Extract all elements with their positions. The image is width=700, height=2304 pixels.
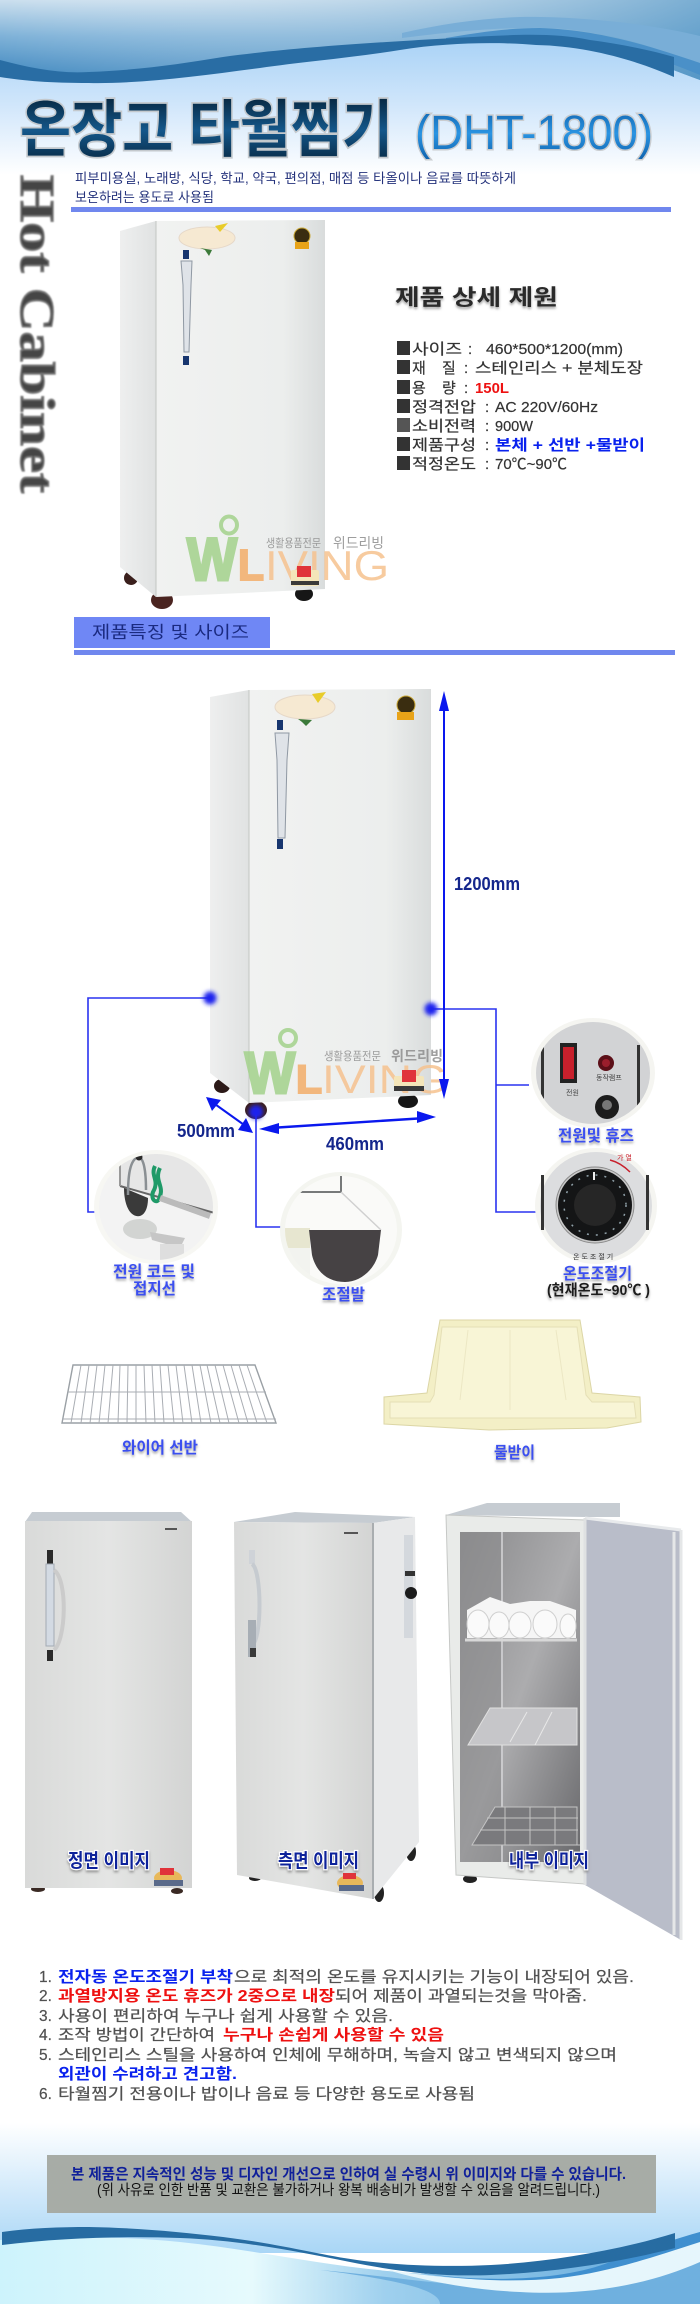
specification list: 사이즈 <box>412 341 462 358</box>
usage description: 보온하려는 용도로 사용됨 <box>75 190 214 205</box>
usage description: 피부미용실, 노래방, 식당, 학교, 약국, 편의점, 매점 등 타올이나 음료를 따뜻하게 <box>75 171 516 186</box>
section tab: features and size <box>74 617 270 648</box>
caption: temperature controller <box>547 1265 650 1299</box>
specification list: 70℃~90℃ <box>495 456 567 473</box>
callout lens: power switch and fuse: 전원 <box>566 1088 579 1097</box>
caption: drip tray: 물받이 <box>494 1444 535 1462</box>
caption: interior view: 내부 이미지 <box>509 1850 589 1872</box>
watermark logo 1: W <box>187 526 237 593</box>
feature list: 4. <box>39 2027 52 2044</box>
callout lens: power cord and ground wire <box>94 1150 218 1264</box>
caption: side view: 측면 이미지 <box>278 1850 359 1872</box>
header wave banner <box>0 0 700 175</box>
sticker 2 <box>394 1070 424 1091</box>
title: (DHT-1800) <box>415 107 653 160</box>
feature list: 3. <box>39 2008 52 2025</box>
feature list: 으로 최적의 온도를 유지시키는 기능이 내장되어 있음. <box>234 1968 634 1986</box>
watermark logo 1: 생활용품전문 <box>266 536 321 550</box>
feature list: 사용이 편리하여 누구나 쉽게 사용할 수 있음. <box>58 2007 393 2025</box>
specification list <box>397 341 645 473</box>
feature list: 2. <box>39 1988 52 2005</box>
dimension label: 500mm: 500mm <box>177 1121 235 1141</box>
sticker: front view <box>154 1868 183 1886</box>
notice box <box>47 2155 656 2213</box>
watermark logo 2: W <box>245 1041 295 1106</box>
caption: power cord <box>113 1263 195 1298</box>
watermark logo 2: 위드리빙 <box>391 1048 443 1064</box>
feature list <box>39 1968 634 2103</box>
caption: power cord: 접지선 <box>133 1280 176 1298</box>
specification list: 460*500*1200(mm) <box>486 341 623 358</box>
feature list: 외관이 수려하고 견고함. <box>58 2065 237 2083</box>
dimension arrow: 460mm <box>259 1111 436 1134</box>
sticker 1 <box>291 566 319 586</box>
caption: temperature controller: 온도조절기 <box>563 1265 632 1283</box>
specification list: 량 <box>442 380 456 397</box>
watermark logo 1 <box>187 516 389 593</box>
caption: wire shelf: 와이어 선반 <box>122 1439 198 1457</box>
specification list: 스테인리스 + 분체도장 <box>475 360 643 377</box>
feature list: 되어 제품이 과열되는것을 막아줌. <box>335 1987 587 2005</box>
feature list: 스테인리스 스틸을 사용하여 인체에 무해하며, 녹슬지 않고 변색되지 않으며 <box>58 2046 617 2064</box>
dimension label: 1200mm: 1200mm <box>454 874 520 894</box>
heading: product specifications: 제품 상세 제원 <box>395 285 558 310</box>
caption: adjustable foot: 조절발 <box>322 1286 365 1304</box>
feature list: 과열방지용 온도 휴즈가 2중으로 내장 <box>58 1987 335 2005</box>
feature list: 타월찜기 전용이나 밥이나 음료 등 다양한 용도로 사용됨 <box>58 2085 475 2103</box>
notice box: 본 제품은 지속적인 성능 및 디자인 개선으로 인하여 실 수령시 위 이미지와 다를 수 있습니다. <box>71 2166 626 2183</box>
notice box: (위 사유로 인한 반품 및 교환은 불가하거나 왕복 배송비가 발생할 수 있음을 알려드립니다.) <box>97 2182 600 2199</box>
specification list: 소비전력 <box>412 418 476 435</box>
callout lens: temperature dial: 온도조절기 <box>573 1252 615 1261</box>
callout connector lines <box>88 998 537 1227</box>
feature list: 조작 방법이 간단하여 <box>58 2026 215 2044</box>
watermark logo 1: L <box>238 541 264 590</box>
photo: side view <box>234 1512 419 1902</box>
title: 온장고 타월찜기 <box>20 96 393 165</box>
specification list: : <box>464 360 468 377</box>
dimension arrow: 1200mm <box>439 691 449 1099</box>
feature list: 6. <box>39 2086 52 2103</box>
specification list: 본체 + 선반 +물받이 <box>495 437 645 454</box>
watermark logo 1: IVING <box>265 542 389 589</box>
specification list: 용 <box>412 380 426 397</box>
caption: temperature controller: (현재온도~90℃ ) <box>547 1282 650 1299</box>
usage description <box>75 171 516 205</box>
watermark logo 2: L <box>296 1058 322 1102</box>
feature list: 1. <box>39 1969 52 1986</box>
dimension photo: cabinet <box>210 689 431 1119</box>
specification list: : <box>464 380 468 397</box>
caption: front view: 정면 이미지 <box>68 1850 150 1872</box>
vertical title: Hot Cabinet: Hot Cabinet <box>10 175 65 494</box>
dimension label: 460mm: 460mm <box>326 1134 384 1154</box>
specification list: : <box>485 456 489 473</box>
callout lens: temperature dial: 가 열 <box>617 1153 632 1162</box>
section tab: features and size: 제품특징 및 사이즈 <box>92 623 249 642</box>
watermark logo 2: IVING <box>322 1058 448 1102</box>
specification list: : <box>468 341 472 358</box>
photo: interior view <box>446 1503 681 1940</box>
specification list: 적정온도 <box>412 456 476 473</box>
photo: front view <box>25 1512 192 1894</box>
dimension arrow: 500mm <box>206 1097 253 1133</box>
footer wave banner <box>0 2123 700 2304</box>
callout dots <box>204 992 438 1119</box>
accessory: drip tray <box>384 1320 641 1430</box>
callout lens: power switch and fuse: 동작램프 <box>596 1073 622 1082</box>
specification list: 정격전압 <box>412 399 476 416</box>
specification list: 제품구성 <box>412 437 476 454</box>
callout lens: temperature dial <box>535 1148 657 1264</box>
callout lens: adjustable foot <box>280 1172 402 1288</box>
specification list: 900W <box>495 418 534 435</box>
specification list: 재 <box>412 360 426 377</box>
watermark logo 2: 생활용품전문 <box>324 1049 381 1063</box>
feature list: 전자동 온도조절기 부착 <box>58 1968 233 1986</box>
caption: power cord: 전원 코드 및 <box>113 1263 195 1281</box>
title <box>20 96 653 165</box>
specification list: : <box>485 437 489 454</box>
feature list: 5. <box>39 2047 52 2064</box>
accessory: wire shelf <box>62 1365 276 1423</box>
caption: power and fuse: 전원및 휴즈 <box>558 1127 634 1145</box>
sticker: side view <box>337 1873 364 1891</box>
specification list: 150L <box>475 380 509 397</box>
specification list: : <box>485 418 489 435</box>
specification list: 질 <box>442 360 456 377</box>
watermark logo 2 <box>245 1030 448 1106</box>
callout lens: power switch and fuse <box>531 1018 655 1130</box>
watermark logo 1: 위드리빙 <box>333 535 384 551</box>
specification list: AC 220V/60Hz <box>495 399 598 416</box>
specification list: : <box>485 399 489 416</box>
product photo: cabinet <box>120 220 325 609</box>
feature list: 누구나 손쉽게 사용할 수 있음 <box>223 2026 444 2044</box>
